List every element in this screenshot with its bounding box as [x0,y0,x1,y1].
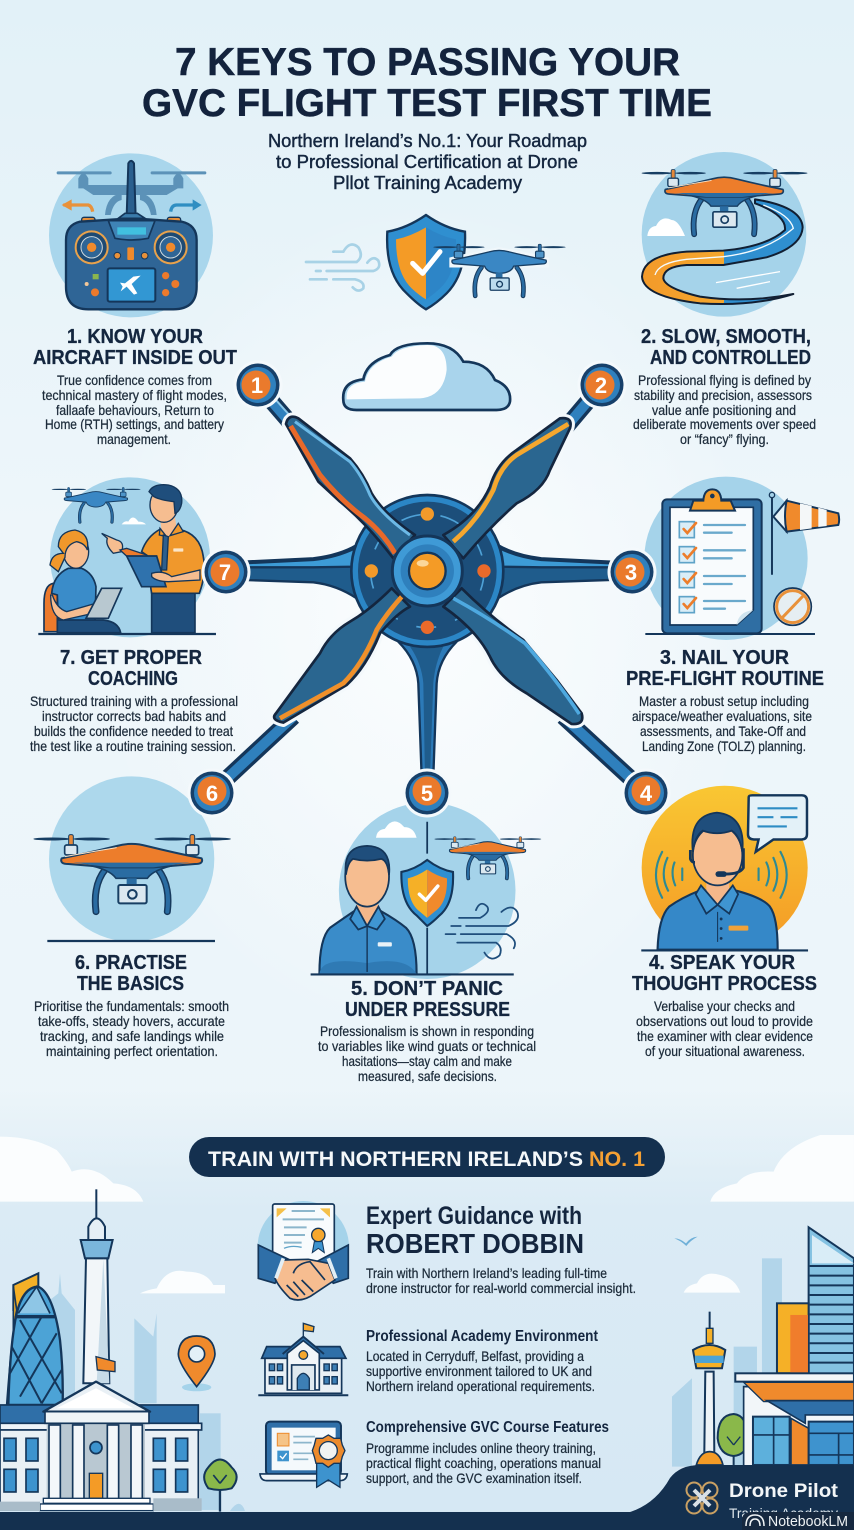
text block: to variables like wind guats or technical [318,1038,536,1054]
white monument tower [81,1189,115,1383]
heading: 4. SPEAK YOUR [649,952,796,974]
heading: Comprehensive GVC Course Features [366,1419,609,1436]
text block: stability and precision, assessors [634,387,812,403]
text block: value anfe positioning and [652,402,796,418]
orange block [777,1303,809,1373]
panel: key 1 [33,153,237,447]
node 6: 6 [206,781,218,806]
icon: drone and curved path [642,152,808,317]
panel: key 4 [632,786,817,1059]
classical building [0,1382,202,1511]
heading: THOUGHT PROCESS [632,973,817,995]
text block: Programme includes online theory training, [366,1440,596,1456]
text block [366,1440,601,1486]
text block: measured, safe decisions. [358,1068,497,1084]
blade halos [274,417,582,724]
logo: Drone Pilot Training Academy [686,1481,839,1521]
heading: COACHING [88,668,178,690]
text block: True confidence comes from [57,372,212,388]
title: 7 KEYS TO PASSING YOUR [175,41,680,84]
left city illustration [0,1137,245,1512]
background buildings [672,1258,782,1467]
heading: PRE-FLIGHT ROUTINE [626,668,824,690]
node 1 [234,360,282,410]
icon: remote controller [49,153,213,317]
text block: management. [97,431,171,447]
text block: Prioritise the fundamentals: smooth [34,998,229,1014]
heading: 1. KNOW YOUR [67,326,203,348]
heading [60,647,203,690]
text block [636,998,813,1059]
text block [366,1348,595,1394]
text block: Verbalise your checks and [654,998,795,1014]
text block: practical flight coaching, operations manual [366,1455,601,1471]
text block [34,998,229,1059]
text block: Landing Zone (TOLZ) planning. [642,738,806,754]
text block: Train with Northern Ireland’s leading full-time [366,1265,607,1281]
text block: maintaining perfect orientation. [46,1043,218,1059]
icon: shield [387,215,465,309]
panel: key 7 [30,477,238,754]
text block [366,1265,636,1296]
text block: supportive environment tailored to UK and [366,1363,592,1379]
panel: academy environment [258,1323,599,1395]
text block [633,372,816,447]
subtitle: Northern Ireland’s No.1: Your Roadmap [268,130,587,151]
heading [75,952,187,995]
arms [243,545,611,777]
panel: key 3 [626,477,839,754]
radio tower [693,1312,725,1465]
text block [30,693,238,754]
icon: checklist and windsock [644,477,839,640]
heading: 3. NAIL YOUR [660,647,790,669]
heading [626,647,824,690]
heading: 6. PRACTISE [75,952,187,974]
text block: drone instructor for real-world commercial insight. [366,1280,636,1296]
text block: the examiner with clear evidence [637,1028,813,1044]
text block: deliberate movements over speed [633,416,816,432]
node 6 [188,768,236,818]
heading: 7. GET PROPER [60,647,203,669]
text block [42,372,227,447]
text block: Professional flying is defined by [638,372,811,388]
heading [345,978,510,1021]
cloud [710,1135,854,1202]
NotebookLM badge: NotebookLM [768,1513,848,1530]
node 2: 2 [595,373,607,398]
subtitle: Pllot Training Academy [333,172,523,193]
numbered nodes [188,360,670,818]
node 5: 5 [421,781,433,806]
panel: key 6 [33,776,231,1059]
text block: instructor corrects bad habits and [42,708,226,724]
text block: support, and the GVC examination itself. [366,1470,582,1486]
text block: Northern ireland operational requirements. [366,1378,595,1394]
text block [318,1023,536,1084]
text block: observations out loud to provide [636,1013,813,1029]
hub disc [351,495,503,647]
node 4 [622,768,670,818]
text block: the test like a routine training session. [30,738,236,754]
text block: Structured training with a professional [30,693,238,709]
banner: TRAIN WITH NORTHERN IRELAND’S NO. 1 [208,1147,645,1171]
modern building [735,1373,854,1467]
text block: tracking, and safe landings while [40,1028,224,1044]
text block: Professionalism is shown in responding [320,1023,534,1039]
text block: builds the confidence needed to treat [34,723,233,739]
icon: blue drone [433,244,566,296]
text block: technical mastery of flight modes, [42,387,227,403]
node 1: 1 [251,373,263,398]
icon: handshake and certificate [258,1201,349,1300]
icon: logo drone [686,1482,718,1514]
heading: UNDER PRESSURE [345,999,510,1021]
node 5 [402,768,452,818]
logo: Drone Pilot Training Academy: Training Academy [729,1505,838,1521]
tree [204,1459,245,1512]
panel: expert guidance [258,1201,636,1300]
footer bar and logo base [0,1465,854,1530]
icon: cloud [343,343,510,410]
text block: hasitations—stay calm and make [342,1053,512,1069]
panel: GVC course features [260,1419,609,1487]
heading [641,326,811,369]
background buildings [50,1273,221,1510]
text block: fallaafe behaviours, Return to [56,402,214,418]
text block: take-offs, steady hovers, accurate [38,1013,225,1029]
propeller blades [274,417,582,724]
icon: orange drone [33,776,231,942]
panel: key 5 [311,802,541,1084]
tall glass building [809,1227,854,1377]
title: GVC FLIGHT TEST FIRST TIME [142,82,712,125]
heading [33,326,237,369]
node 2 [578,360,626,410]
panel: key 2 [633,152,816,447]
heading: AIRCRAFT INSIDE OUT [33,347,237,369]
icon: wind, shield and drone [306,215,566,309]
heading: Expert Guidance with [366,1202,582,1230]
icon: pilot, shield and drone in wind [311,802,541,979]
subtitle [268,130,587,193]
text block [632,693,812,754]
text block: assessments, and Take-Off and [640,723,806,739]
node 4: 4 [640,781,653,806]
icon: laptop and badge [260,1422,347,1487]
heading: 5. DON’T PANIC [351,978,503,1000]
node 3 [608,548,656,596]
bird [674,1237,698,1246]
node 7: 7 [219,560,231,585]
heading: 2. SLOW, SMOOTH, [641,326,811,348]
heading: THE BASICS [77,973,184,995]
node 7 [202,548,250,596]
heading [366,1202,584,1259]
icon: instructor and student [38,477,216,637]
heading: Professional Academy Environment [366,1328,599,1345]
heading: AND CONTROLLED [650,347,811,369]
cloud [0,1137,143,1202]
gherkin tower [7,1273,63,1405]
icon: pilot with headset [641,786,808,950]
central drone diagram [212,383,646,793]
logo: Drone Pilot Training Academy: Drone Pilot [729,1481,839,1502]
text block: Located in Cerryduff, Belfast, providing a [366,1348,584,1364]
icon: academy building [258,1323,348,1395]
text block: Home (RTH) settings, and battery [45,416,224,432]
subtitle: to Professional Certification at Drone [276,151,578,172]
heading: ROBERT DOBBIN [366,1228,584,1259]
text block: or “fancy” flying. [680,431,769,447]
text block: airspace/weather evaluations, site [632,708,812,724]
heading [632,952,817,995]
hub centre [392,536,462,606]
icon: wind lines [306,244,379,291]
node 3: 3 [625,560,637,585]
text block: of your situational awareness. [645,1043,805,1059]
title [142,41,712,125]
map pin [178,1336,215,1391]
tree [718,1414,749,1465]
right city illustration [672,1135,854,1467]
text block: Master a robust setup including [639,693,809,709]
banner [189,1137,665,1177]
